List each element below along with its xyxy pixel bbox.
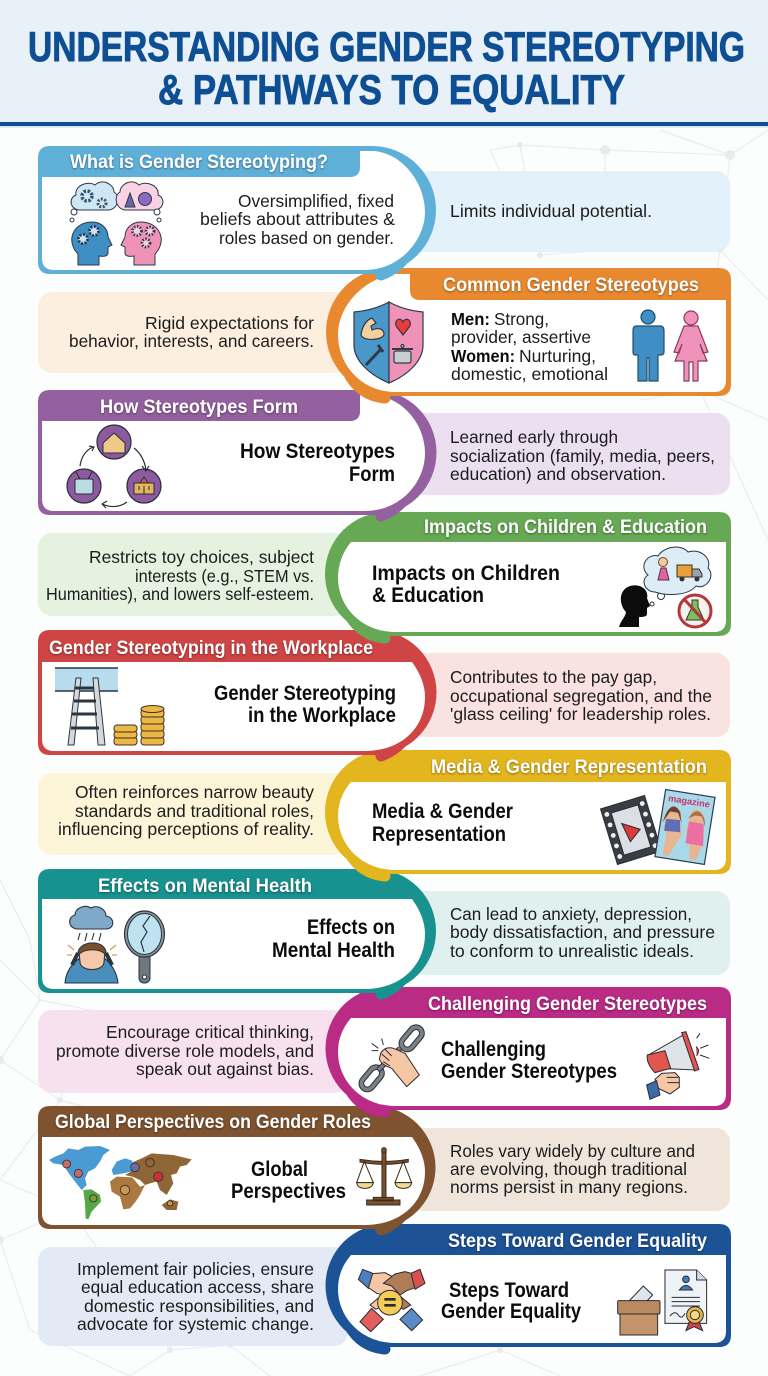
heading: in the Workplace xyxy=(248,703,396,727)
heading xyxy=(272,915,395,962)
heading xyxy=(441,1278,581,1323)
side note: media effects: influencing perceptions of reality. xyxy=(58,819,314,839)
icon: two heads with thought clouds xyxy=(70,182,163,265)
icon: stressed person under rain cloud xyxy=(65,906,118,983)
definition text: Oversimplified, fixed xyxy=(238,191,394,211)
header: Media & Gender Representation xyxy=(431,756,707,778)
side note: limits potential: Limits individual potential. xyxy=(450,201,652,221)
side note: equality actions xyxy=(38,1247,348,1346)
heading xyxy=(372,799,514,846)
header: Effects on Mental Health xyxy=(98,875,312,897)
side note: mental health effects: to conform to unrealistic ideals. xyxy=(450,941,694,961)
heading: Global xyxy=(251,1157,308,1181)
heading: Steps Toward xyxy=(449,1278,569,1302)
heading: Gender Stereotypes xyxy=(441,1059,617,1083)
side note: how stereotypes are learned: education) and observation. xyxy=(450,464,666,484)
side note: equality actions: domestic responsibilities, and xyxy=(84,1296,314,1316)
side note: limits potential xyxy=(410,171,730,252)
side note: children restrictions xyxy=(38,533,348,616)
heading: Effects on xyxy=(307,915,395,939)
icon: thought cloud with doll and truck xyxy=(644,547,711,594)
panel: global perspectives xyxy=(38,1106,436,1230)
heading: Challenging xyxy=(441,1037,546,1061)
header: Steps Toward Gender Equality xyxy=(448,1230,707,1252)
header: Gender Stereotyping in the Workplace xyxy=(49,637,373,659)
panel: steps toward gender equality xyxy=(325,1224,731,1349)
side note: how to challenge: speak out against bias. xyxy=(136,1059,314,1079)
heading: Representation xyxy=(372,822,506,846)
list of stereotypes xyxy=(451,309,608,384)
side note: how to challenge xyxy=(38,1010,348,1093)
icon: coin stacks xyxy=(114,706,164,745)
side note: children restrictions: Restricts toy choices, subject xyxy=(89,547,314,567)
side note: children restrictions: Humanities), and lowers self-esteem. xyxy=(46,584,314,604)
icon: split shield xyxy=(354,302,423,383)
icon: handshake with equals sign xyxy=(358,1269,425,1332)
side note: workplace effects: occupational segregation, and the xyxy=(450,686,712,706)
heading: Impacts on Children xyxy=(372,561,560,585)
side note: how to challenge: promote diverse role models, and xyxy=(56,1041,314,1061)
side note: cultural variation xyxy=(410,1128,730,1211)
panel: what is gender stereotyping xyxy=(38,146,436,275)
panel: how stereotypes form xyxy=(38,390,436,516)
side note: rigid expectations xyxy=(38,292,348,373)
side note: media effects: Often reinforces narrow beauty xyxy=(75,782,314,802)
header: Impacts on Children & Education xyxy=(424,516,707,538)
side note: media effects xyxy=(38,773,348,855)
list of stereotypes: Men: xyxy=(451,309,490,329)
header: Challenging Gender Stereotypes xyxy=(428,993,707,1015)
side note: how stereotypes are learned: Learned early through xyxy=(450,427,618,447)
heading: How Stereotypes xyxy=(240,439,395,463)
side note: workplace effects xyxy=(410,653,730,737)
side note: media effects: standards and traditional roles, xyxy=(75,801,314,821)
icon: woman figure xyxy=(674,311,708,381)
icon: socialization cycle of home, media and school xyxy=(67,425,161,508)
side note: mental health effects: body dissatisfaction, and pressure xyxy=(450,922,715,942)
title: & PATHWAYS TO EQUALITY xyxy=(158,66,625,113)
heading xyxy=(231,1157,346,1203)
title xyxy=(28,23,745,113)
heading xyxy=(441,1037,617,1083)
panel: gender stereotyping in the workplace xyxy=(38,630,436,756)
list of stereotypes: Strong, xyxy=(494,309,549,329)
heading: Gender Stereotyping xyxy=(214,681,396,705)
title banner xyxy=(0,0,768,128)
icon: megaphone xyxy=(647,1032,709,1099)
icon: magazine cover xyxy=(655,790,715,864)
heading xyxy=(240,439,395,486)
panel: media and gender representation xyxy=(325,750,731,876)
heading xyxy=(372,561,560,607)
icon: breaking chain in fist xyxy=(359,1025,424,1092)
heading: Gender Equality xyxy=(441,1299,581,1323)
header: What is Gender Stereotyping? xyxy=(70,151,328,173)
heading xyxy=(214,681,396,727)
side note: workplace effects: Contributes to the pay gap, xyxy=(450,667,657,687)
heading: Form xyxy=(349,462,395,486)
definition text: roles based on gender. xyxy=(219,228,394,248)
panel: common gender stereotypes xyxy=(326,268,731,398)
side note: children restrictions: interests (e.g., STEM vs. xyxy=(135,566,314,586)
side note: how stereotypes are learned xyxy=(410,413,730,495)
heading: & Education xyxy=(372,583,484,607)
header: Common Gender Stereotypes xyxy=(443,274,699,296)
icon: cracked hand mirror xyxy=(124,911,164,983)
panel: impacts on children and education xyxy=(325,512,731,638)
side note: equality actions: equal education access, share xyxy=(81,1277,314,1297)
side note: rigid expectations: Rigid expectations for xyxy=(145,313,314,333)
side note: cultural variation: are evolving, though traditional xyxy=(450,1159,687,1179)
icon: balance scales xyxy=(357,1148,412,1205)
side note: mental health effects xyxy=(410,891,730,975)
side note: rigid expectations: behavior, interests, and careers. xyxy=(69,331,314,351)
icon: world map xyxy=(49,1146,192,1219)
definition text xyxy=(200,191,395,248)
list of stereotypes: provider, assertive xyxy=(451,327,591,347)
list of stereotypes: Women: xyxy=(451,346,515,366)
icon: magazine cover: magazine xyxy=(668,793,711,810)
header: Global Perspectives on Gender Roles xyxy=(55,1111,371,1133)
heading: Media & Gender xyxy=(372,799,514,823)
list of stereotypes: domestic, emotional xyxy=(451,364,608,384)
definition text: beliefs about attributes & xyxy=(200,209,395,229)
side note: equality actions: advocate for systemic change. xyxy=(77,1314,314,1334)
heading: Mental Health xyxy=(272,938,395,962)
icon: child silhouette thinking xyxy=(619,585,664,627)
icon: film strip with play button xyxy=(601,796,661,864)
side note: workplace effects: 'glass ceiling' for leadership roles. xyxy=(450,704,711,724)
header: How Stereotypes Form xyxy=(100,396,298,418)
panel: effects on mental health xyxy=(38,869,436,994)
panel: challenging gender stereotypes xyxy=(325,987,731,1112)
side note: equality actions: Implement fair policies, ensure xyxy=(77,1259,314,1279)
side note: mental health effects: Can lead to anxiety, depression, xyxy=(450,904,692,924)
icon: man figure xyxy=(633,310,664,381)
icon: glass ceiling and ladder xyxy=(55,668,118,745)
heading: Perspectives xyxy=(231,1179,346,1203)
icon: ballot box and certificate xyxy=(618,1270,707,1335)
list of stereotypes: Nurturing, xyxy=(519,346,596,366)
icon: prohibited science flask xyxy=(679,595,711,627)
side note: cultural variation: Roles vary widely by culture and xyxy=(450,1141,695,1161)
side note: how stereotypes are learned: socialization (family, media, peers, xyxy=(450,446,715,466)
side note: how to challenge: Encourage critical thinking, xyxy=(106,1022,314,1042)
side note: cultural variation: norms persist in many regions. xyxy=(450,1177,688,1197)
